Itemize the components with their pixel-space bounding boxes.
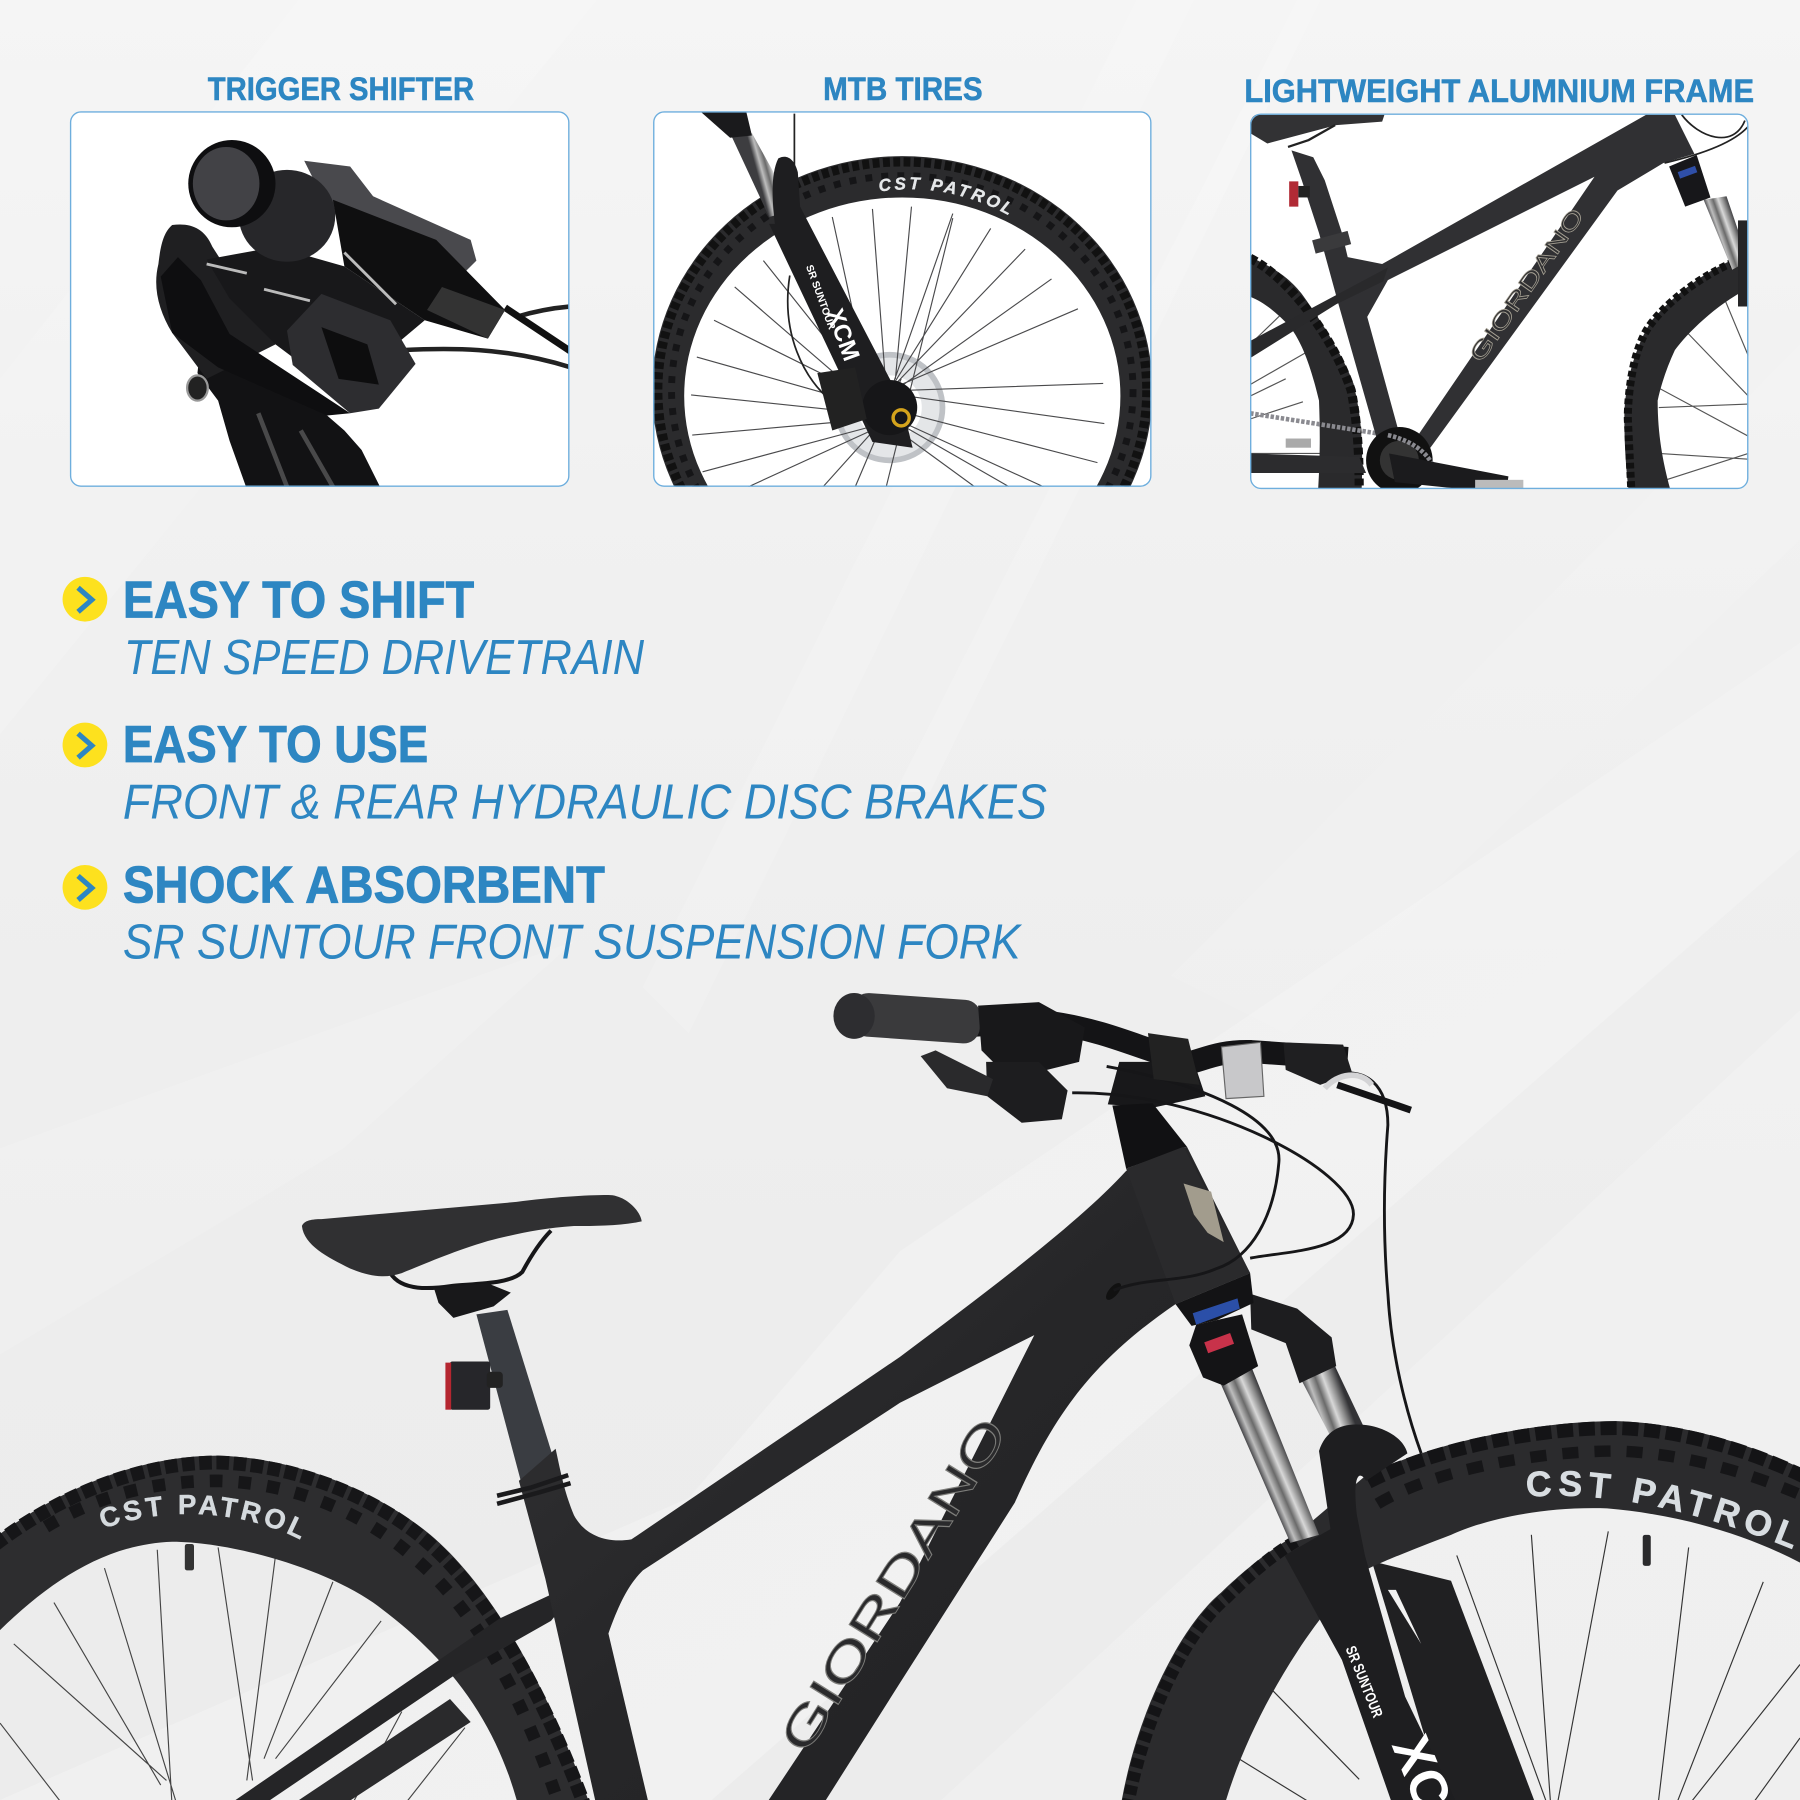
fork graphics: SR SUNTOUR <box>1342 1644 1386 1720</box>
brake cables <box>1072 1066 1353 1290</box>
rear wheel <box>0 1456 590 1800</box>
bike frame <box>519 1147 1250 1800</box>
panel: mtb tires photo: XCM <box>821 305 865 365</box>
head tube badge <box>1184 1184 1224 1242</box>
title: trigger shifter: TRIGGER SHIFTER <box>208 70 474 107</box>
handlebar and controls <box>833 992 1411 1123</box>
cable guide clamp <box>497 1475 571 1504</box>
feature: easy to use: FRONT & REAR HYDRAULIC DISC BRAKES <box>123 774 1047 829</box>
cable port <box>1103 1281 1124 1302</box>
feature: easy to use <box>63 715 1047 829</box>
saddle <box>302 1195 642 1318</box>
tire sidewall lettering: CST PATROL <box>879 177 1010 215</box>
panel: mtb tires photo: SR SUNTOUR <box>803 264 837 332</box>
tire sidewall lettering: CST PATROL <box>100 1494 302 1540</box>
feature: easy to shift: TEN SPEED DRIVETRAIN <box>124 630 644 685</box>
fork graphics <box>1342 1644 1462 1800</box>
fork lower leg <box>1285 1424 1459 1800</box>
fork crown and headset <box>1176 1273 1336 1386</box>
frame brand lettering: GIORDANO <box>1464 203 1589 367</box>
panel: trigger shifter photo <box>70 111 571 489</box>
head tube and stem <box>1108 1062 1250 1304</box>
feature: easy to shift <box>63 571 644 685</box>
rear reflector <box>445 1361 503 1410</box>
panel: mtb tires photo <box>653 111 1152 487</box>
front tire <box>1122 1421 1800 1800</box>
icon: yellow bullet with chevron <box>63 865 107 910</box>
gap between fork legs <box>1388 1590 1421 1644</box>
valve stem <box>1643 1535 1651 1566</box>
feature: easy to shift: EASY TO SHIFT <box>123 571 474 629</box>
front cable <box>1336 1073 1421 1453</box>
title: lightweight aluminium frame: LIGHTWEIGHT ALUMNIUM FRAME <box>1244 72 1754 109</box>
feature: shock absorbent: SR SUNTOUR FRONT SUSPENSION FORK <box>123 915 1022 970</box>
suspension fork stanchions <box>1218 1361 1365 1543</box>
icon: yellow bullet with chevron <box>63 577 107 622</box>
feature: easy to use: EASY TO USE <box>123 715 428 773</box>
front wheel spokes <box>1239 1531 1800 1800</box>
feature: shock absorbent: SHOCK ABSORBENT <box>123 855 605 913</box>
feature: shock absorbent <box>63 855 1022 970</box>
rear fork leg <box>1372 1561 1537 1800</box>
icon: yellow bullet with chevron <box>63 723 107 767</box>
main bicycle photo <box>0 993 1800 1800</box>
seat post <box>476 1310 568 1506</box>
frame brand lettering: GIORDANO <box>769 1408 1018 1762</box>
seat stay <box>224 1578 585 1800</box>
spokes and disc rotor <box>691 207 1104 487</box>
panel: lightweight aluminium frame photo <box>1246 114 1752 494</box>
title: mtb tires: MTB TIRES <box>823 70 983 107</box>
